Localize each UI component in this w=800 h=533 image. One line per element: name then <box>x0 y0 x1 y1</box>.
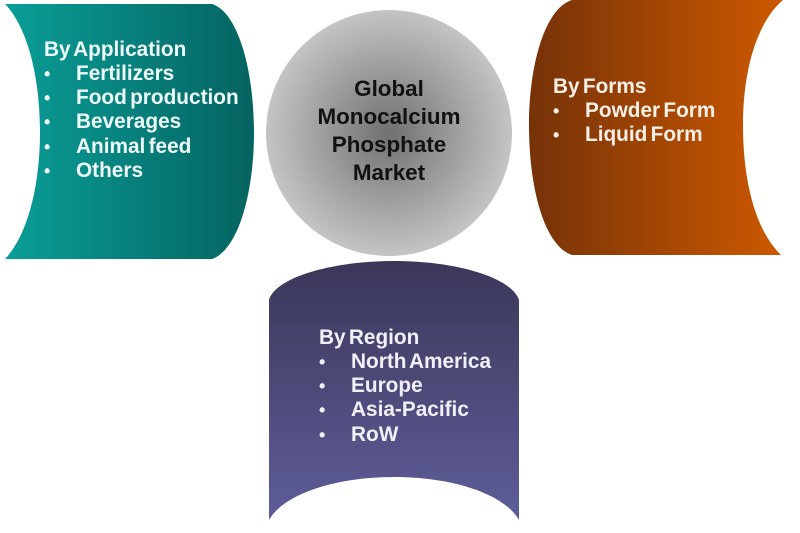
list: regions: • <box>319 400 325 420</box>
teal curved shape <box>5 4 254 259</box>
title text: Phosphate <box>332 132 446 157</box>
list: applications: Food production <box>76 86 239 109</box>
list: applications: Beverages <box>76 110 181 133</box>
list: regions: Europe <box>351 374 423 397</box>
list: applications: Others <box>76 159 143 182</box>
list: applications: • <box>44 64 50 84</box>
list: forms: Liquid Form <box>585 123 703 146</box>
heading: by application: By Application <box>44 38 186 61</box>
list: forms: • <box>553 101 559 121</box>
list: forms <box>553 99 715 146</box>
list: regions: • <box>319 352 325 372</box>
list: applications: • <box>44 137 50 157</box>
list: forms: • <box>553 125 559 145</box>
list: regions: North America <box>351 350 491 373</box>
list: regions: Asia-Pacific <box>351 398 469 421</box>
list: regions: RoW <box>351 423 399 446</box>
list: applications: • <box>44 88 50 108</box>
title text: Global <box>354 76 424 101</box>
title text <box>317 76 461 185</box>
title text: Market <box>353 160 426 185</box>
list: applications: • <box>44 112 50 132</box>
title text: Monocalcium <box>317 104 461 129</box>
list: regions <box>319 350 491 446</box>
heading: by region: By Region <box>319 326 419 349</box>
list: regions: • <box>319 376 325 396</box>
list: applications: Fertilizers <box>76 62 174 85</box>
purple curved shape <box>269 261 519 520</box>
central circle: market title <box>266 10 512 256</box>
grey circle <box>266 10 512 256</box>
list: forms: Powder Form <box>585 99 715 122</box>
list: applications: Animal feed <box>76 135 191 158</box>
panel: by application <box>5 4 254 259</box>
list: applications: • <box>44 161 50 181</box>
list: regions: • <box>319 425 325 445</box>
orange curved shape <box>529 0 783 255</box>
list: applications <box>44 62 239 182</box>
panel: by region <box>269 261 519 520</box>
panel: by forms <box>529 0 783 255</box>
heading: by forms: By Forms <box>553 75 646 98</box>
